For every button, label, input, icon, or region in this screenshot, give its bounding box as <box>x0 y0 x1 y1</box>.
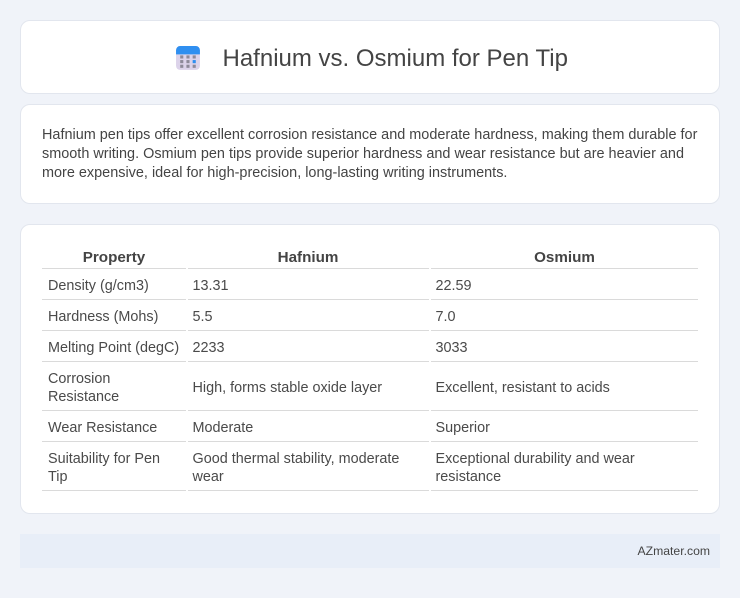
icon: calendar <box>176 46 200 70</box>
row: melting point: Melting Point (degC) <box>48 340 179 356</box>
row: suitability for pen tip: Suitability for Pen <box>48 451 160 467</box>
footer bar <box>20 534 720 568</box>
row: suitability for pen tip: Tip <box>48 469 67 485</box>
row: melting point: 2233 <box>192 340 225 356</box>
row: melting point: 3033 <box>436 340 468 356</box>
title: Hafnium vs. Osmium for Pen Tip <box>222 45 568 72</box>
row: suitability for pen tip: resistance <box>436 469 501 485</box>
row: wear resistance: Moderate <box>192 420 253 436</box>
row: density: 22.59 <box>436 278 472 294</box>
row: density <box>42 278 698 300</box>
row: corrosion resistance: Excellent, resistant to acids <box>436 380 610 396</box>
summary text: Hafnium pen tips offer excellent corrosion resistance and moderate hardness, making them durable for <box>42 127 697 143</box>
table header <box>42 249 698 269</box>
summary text: smooth writing. Osmium pen tips provide superior hardness and wear resistance but are heavier and <box>42 146 684 162</box>
row: corrosion resistance <box>42 371 698 411</box>
panel: comparison table <box>20 224 720 514</box>
row: density: 13.31 <box>192 278 229 294</box>
row: corrosion resistance: Corrosion <box>48 371 110 387</box>
row: hardness: Hardness (Mohs) <box>48 309 158 325</box>
row: melting point <box>42 340 698 362</box>
footer credit: AZmater.com <box>638 544 710 558</box>
row: wear resistance <box>42 420 698 442</box>
row: suitability for pen tip: wear <box>192 469 224 485</box>
row: hardness: 7.0 <box>436 309 456 325</box>
row: density: Density (g/cm3) <box>48 278 149 294</box>
row: wear resistance: Superior <box>436 420 490 436</box>
row: wear resistance: Wear Resistance <box>48 420 157 436</box>
panel: summary <box>20 104 720 204</box>
row: hardness: 5.5 <box>192 309 213 325</box>
row: suitability for pen tip: Good thermal stability, moderate <box>192 451 399 467</box>
row: hardness <box>42 309 698 331</box>
summary text <box>42 127 698 181</box>
table header: Hafnium <box>278 249 338 266</box>
row: suitability for pen tip: Exceptional durability and wear <box>436 451 635 467</box>
row: corrosion resistance: High, forms stable oxide layer <box>192 380 382 396</box>
summary text: more expensive, ideal for high-precision, long-lasting writing instruments. <box>42 165 507 181</box>
table header: Osmium <box>534 249 595 266</box>
table header: Property <box>83 249 145 266</box>
panel: title card <box>20 20 720 94</box>
row: suitability for pen tip <box>42 451 698 491</box>
row: corrosion resistance: Resistance <box>48 389 119 405</box>
